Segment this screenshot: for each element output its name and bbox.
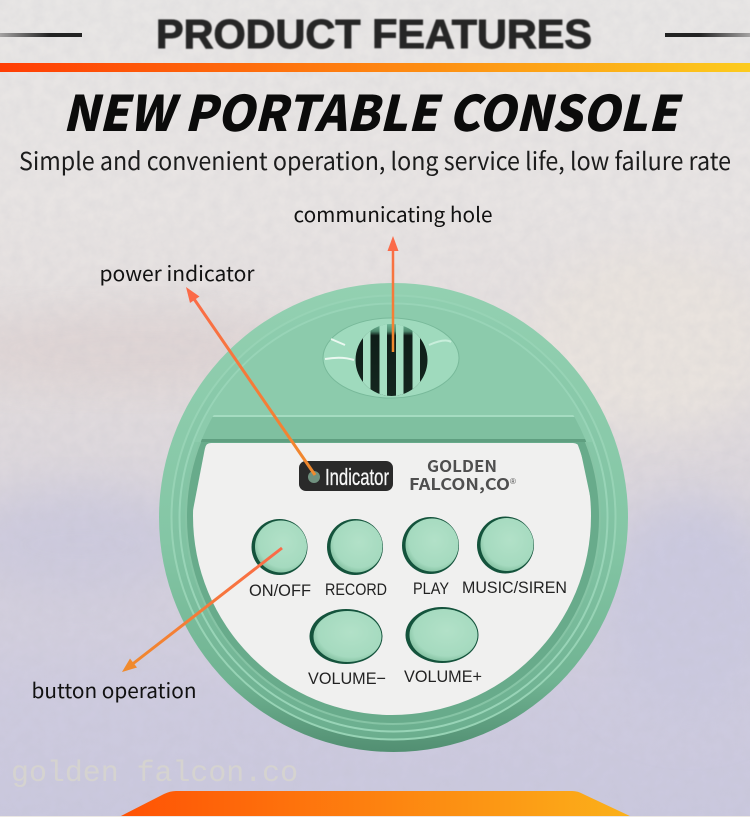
bottom orange trapezoid [119,791,632,817]
subtitle: Simple and convenient operation, long service life, low failure rate [19,143,731,178]
button labels: MUSIC/SIREN [462,578,567,597]
section heading: PRODUCT FEATURES [156,11,592,57]
indicator badge [299,461,393,491]
watermark: golden falcon.co [11,757,298,791]
brand label: ® [510,477,516,486]
label: button operation: button operation [32,674,197,704]
bottom strip [0,816,750,817]
arrow: button operation [122,548,282,672]
round buttons [252,516,534,575]
oval volume buttons [310,607,478,664]
speaker recess [323,318,459,398]
button labels: RECORD [325,580,387,599]
main title: NEW PORTABLE CONSOLE [62,75,683,146]
button labels: VOLUME+ [404,667,482,686]
button labels: PLAY [413,579,449,598]
header line left [0,33,82,37]
label: communicating hole: communicating hole [294,198,492,228]
orange gradient bar [0,63,750,72]
communicating hole grille [356,324,428,396]
arrow: communicating hole [388,236,398,352]
device console [159,283,628,752]
outer ring [159,283,628,752]
label: power indicator: power indicator [100,257,255,287]
brand label: FALCON,CO [409,471,510,495]
brand label: GOLDEN [427,453,497,477]
white control panel [193,443,591,715]
button labels: ON/OFF [249,581,311,600]
indicator badge: Indicator [325,464,389,490]
arrow: power indicator [186,287,315,475]
brand label [409,453,516,495]
button labels [249,578,567,688]
top cap [201,311,586,442]
button labels: VOLUME− [308,669,386,688]
header line right [665,33,750,37]
